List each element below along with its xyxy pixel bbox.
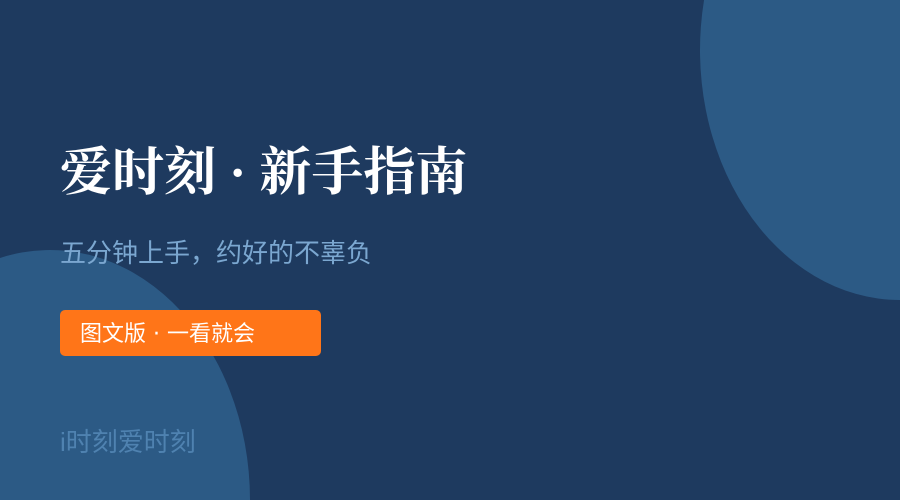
subtitle: 五分钟上手，约好的不辜负: [60, 239, 372, 269]
badge: format label: [60, 310, 321, 356]
brand wordmark: i时刻爱时刻: [60, 427, 196, 457]
ellipse: bottom left: [0, 250, 250, 500]
ellipse: top right: [700, 0, 900, 300]
title: 爱时刻 · 新手指南: [60, 145, 467, 202]
badge text: 图文版 · 一看就会: [80, 322, 255, 347]
